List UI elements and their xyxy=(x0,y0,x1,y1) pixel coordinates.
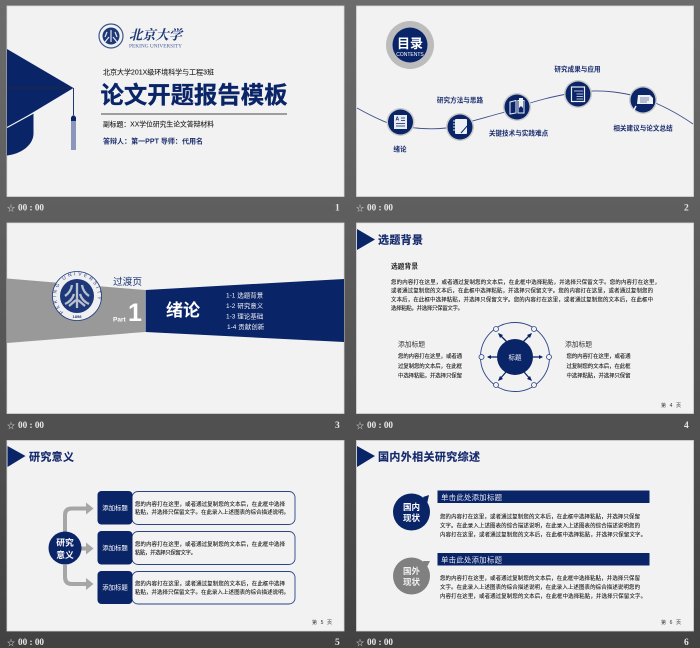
bubble: domestic status: 现状 xyxy=(403,513,420,523)
text block: domestic: 文字。在此录入上述图表的综合描述说明，在此录入上述图表的综合描述说明您的 xyxy=(440,522,640,530)
node: methods xyxy=(446,113,474,141)
footer: slide 2: 2 xyxy=(684,204,689,214)
footer: slide 1 xyxy=(7,204,340,214)
footer: slide 1: ☆ xyxy=(7,204,15,213)
footer: slide 3: 3 xyxy=(335,421,340,431)
node: introduction: A xyxy=(396,116,400,122)
text: presenter and advisor: 答辩人：第一PPT 导师：代用名 xyxy=(103,136,203,146)
hub: research significance circle: 意义 xyxy=(56,549,74,560)
footer: slide 5: 5 xyxy=(335,638,340,648)
bubble: international status: 国外 xyxy=(403,566,420,576)
text block: international: 文字。在此录入上述图表的综合描述说明，在此录入上述图表的综合描述说明您的 xyxy=(440,583,640,591)
text block: paragraph: 文本后，在此框中选择粘贴，并选择只保留文字。您的内容打在这里，或者通过复制您的文本后，在此框中 xyxy=(391,296,653,304)
heading: 研究意义 xyxy=(29,450,74,464)
timeline curve xyxy=(357,91,693,129)
text: class line: 北京大学201X级环境科学与工程3班 xyxy=(103,68,214,76)
panel: slide 6 literature review xyxy=(356,440,694,631)
text: transition page: 过渡页 xyxy=(113,275,142,288)
text block: paragraph: 您的内容打在这里，或者通过复制您的文本后，在此框中选择粘贴，并选择只保留文字。您的内容打在这里， xyxy=(391,278,660,286)
logo: Peking University seal and wordmark: 北京大学 xyxy=(129,28,184,42)
title: 论文开题报告模板 xyxy=(100,81,288,108)
text block: paragraph: 或者通过复制您的文本后，在此框中选择粘贴，并选择只保留文字。您的内容打在这里，或者通过复制您的 xyxy=(391,286,653,294)
icon: graduation cap xyxy=(7,49,76,156)
text block: right note: 添加标题 xyxy=(565,340,592,348)
page number: 第 4 页 xyxy=(661,402,681,409)
footer: slide 4: 00 : 00 xyxy=(367,421,393,431)
icon: contents badge xyxy=(386,21,434,69)
text: section name: 绪论 xyxy=(166,301,200,320)
footer: slide 4: ☆ xyxy=(356,422,364,430)
divider xyxy=(101,113,287,115)
footer: slide 6: 00 : 00 xyxy=(367,638,393,648)
text block: right note: 过复制您的文本后，在此框 xyxy=(566,362,631,370)
subheading: 选题背景 xyxy=(391,262,418,270)
panel: slide 5 research significance xyxy=(7,440,344,631)
card: item three: 添加标题 xyxy=(102,582,128,592)
icon: contents badge: 目录 xyxy=(397,36,423,51)
logo: Peking University seal and wordmark xyxy=(99,24,184,50)
footer: slide 1: 00 : 00 xyxy=(18,204,44,214)
panel: slide 3 section divider xyxy=(6,222,344,414)
header bar: domestic: 单击此处添加标题 xyxy=(441,493,503,502)
label: methods: 研究方法与思路 xyxy=(437,96,483,104)
label: key technology: 关键技术与实践难点 xyxy=(489,128,549,138)
text block: left note: 过复制您的文本后，在此框 xyxy=(398,362,463,370)
list: section topics: 1-2 研究意义 xyxy=(226,301,264,310)
page number: 第 5 页 xyxy=(312,619,332,626)
footer: slide 6: 6 xyxy=(684,638,689,648)
list: section topics: 1-4 贡献创新 xyxy=(227,322,265,331)
label: introduction: 绪论 xyxy=(393,144,407,154)
card: item one: 您的内容打在这里，或者通过复制您的文本后，在此框中选择 xyxy=(135,500,286,508)
footer: slide 4: 4 xyxy=(684,421,689,431)
footer: slide 2: ☆ xyxy=(356,204,364,213)
text block: international: 内容打在这里，或者通过复制您的文本后，在此框中选择粘贴，并选择只保留文字。 xyxy=(440,592,646,600)
heading: 选题背景 xyxy=(378,232,423,246)
text block: international: 您的内容打在这里，或者通过复制您的文本后，在此框中选择粘贴，并选择只保留 xyxy=(440,574,640,582)
header bar: domestic xyxy=(438,490,650,503)
footer: slide 2 xyxy=(356,204,689,214)
bubble: domestic status xyxy=(393,494,430,530)
text block: domestic: 内容打在这里，或者通过复制您的文本后，在此框中选择粘贴，并选择只保留文字。 xyxy=(440,530,646,538)
footer: slide 6: ☆ xyxy=(356,638,364,648)
text block: left note: 中选择粘贴，并选择只保留 xyxy=(398,372,462,380)
text block: left note xyxy=(398,340,463,380)
text block: left note: 添加标题 xyxy=(398,340,425,348)
footer: slide 5 xyxy=(7,638,340,648)
diagram: radial hub: 标题 xyxy=(508,352,522,362)
footer: slide 1: 1 xyxy=(335,204,340,214)
card: item one xyxy=(98,491,295,524)
list: section topics: 1-1 选题背景 xyxy=(226,290,264,300)
navy band xyxy=(146,279,344,342)
page number: 第 6 页 xyxy=(661,619,681,626)
bubble: domestic status: 国内 xyxy=(403,502,420,512)
text: part number: Part xyxy=(113,316,126,324)
text block: paragraph: 选择粘贴，并选择只保留文字。 xyxy=(391,304,463,312)
footer: slide 6 xyxy=(356,638,689,648)
bubble: international status xyxy=(393,558,430,594)
card: item three: 您的内容打在这里，或者通过复制您的文本后，在此框中选择 xyxy=(135,580,286,588)
text block: right note xyxy=(565,340,631,380)
icon: contents badge: CONTENTS xyxy=(396,52,424,58)
icon: header triangle xyxy=(357,446,375,467)
footer: slide 3: 00 : 00 xyxy=(18,421,44,431)
bubble: international status: 现状 xyxy=(403,577,420,587)
text block: domestic: 您的内容打在这里，或者通过复制您的文本后，在此框中选择粘贴，并选择只保留 xyxy=(440,512,640,520)
card: item two xyxy=(98,531,295,564)
card: item one: 粘贴，并选择只保留文字。在此录入上述图表的综合描述说明。 xyxy=(135,508,289,516)
grey band xyxy=(7,278,145,343)
footer: slide 5: 00 : 00 xyxy=(18,638,44,648)
card: item two: 粘贴，并选择只保留文字。 xyxy=(135,548,196,556)
footer: slide 5: ☆ xyxy=(7,638,15,648)
card: item two: 添加标题 xyxy=(102,543,128,552)
text block: right note: 您的内容打在这里，或者通 xyxy=(566,352,631,360)
footer: slide 2: 00 : 00 xyxy=(367,204,393,214)
list: section topics xyxy=(226,290,265,331)
arrows: branch connectors xyxy=(65,502,94,590)
panel: slide 2 contents xyxy=(356,6,694,196)
footer: slide 3: ☆ xyxy=(7,422,15,430)
text: part number: 1 xyxy=(128,299,142,327)
node: recommendations xyxy=(629,86,657,114)
heading: 国内外相关研究综述 xyxy=(378,450,480,464)
text block: international xyxy=(440,574,646,600)
icon: university seal: PEKING UNIVERSITY xyxy=(53,272,101,314)
card: item two: 您的内容打在这里，或者通过复制您的文本后，在此框中选择 xyxy=(135,540,286,548)
text block: paragraph xyxy=(391,278,660,312)
hub: research significance circle xyxy=(48,532,82,564)
footer: slide 4 xyxy=(356,421,689,431)
list: section topics: 1-3 理论基础 xyxy=(226,312,264,320)
text block: left note: 您的内容打在这里，或者通 xyxy=(398,352,463,360)
header bar: international: 单击此处添加标题 xyxy=(441,556,503,564)
text block: domestic xyxy=(440,512,646,538)
text: part number xyxy=(113,299,142,327)
card: item one: 添加标题 xyxy=(102,503,128,512)
label: results: 研究成果与应用 xyxy=(554,64,601,74)
panel: slide 1 cover xyxy=(7,6,344,196)
icon: header triangle xyxy=(8,446,26,467)
hub: research significance circle: 研究 xyxy=(56,536,74,548)
icon: header triangle xyxy=(357,229,375,250)
card: item three xyxy=(98,571,295,604)
text block: right note: 中选择粘贴，并选择只保留 xyxy=(566,372,630,380)
node: results xyxy=(564,80,592,108)
header bar: international xyxy=(438,553,650,566)
text: subtitle: 副标题：XX学位研究生论文答辩材料 xyxy=(103,120,214,128)
logo: Peking University seal and wordmark: PEKING UNIVERSITY xyxy=(129,44,182,50)
label: recommendations: 相关建议与论文总结 xyxy=(613,124,673,132)
node: key technology xyxy=(503,93,531,121)
diagram: radial hub xyxy=(479,322,552,392)
card: item three: 粘贴，并选择只保留文字。在此录入上述图表的综合描述说明。 xyxy=(135,588,289,596)
node: introduction xyxy=(386,108,414,136)
footer: slide 3 xyxy=(7,421,340,431)
icon: university seal: 1898 xyxy=(73,314,82,319)
panel: slide 4 topic background xyxy=(356,223,694,414)
